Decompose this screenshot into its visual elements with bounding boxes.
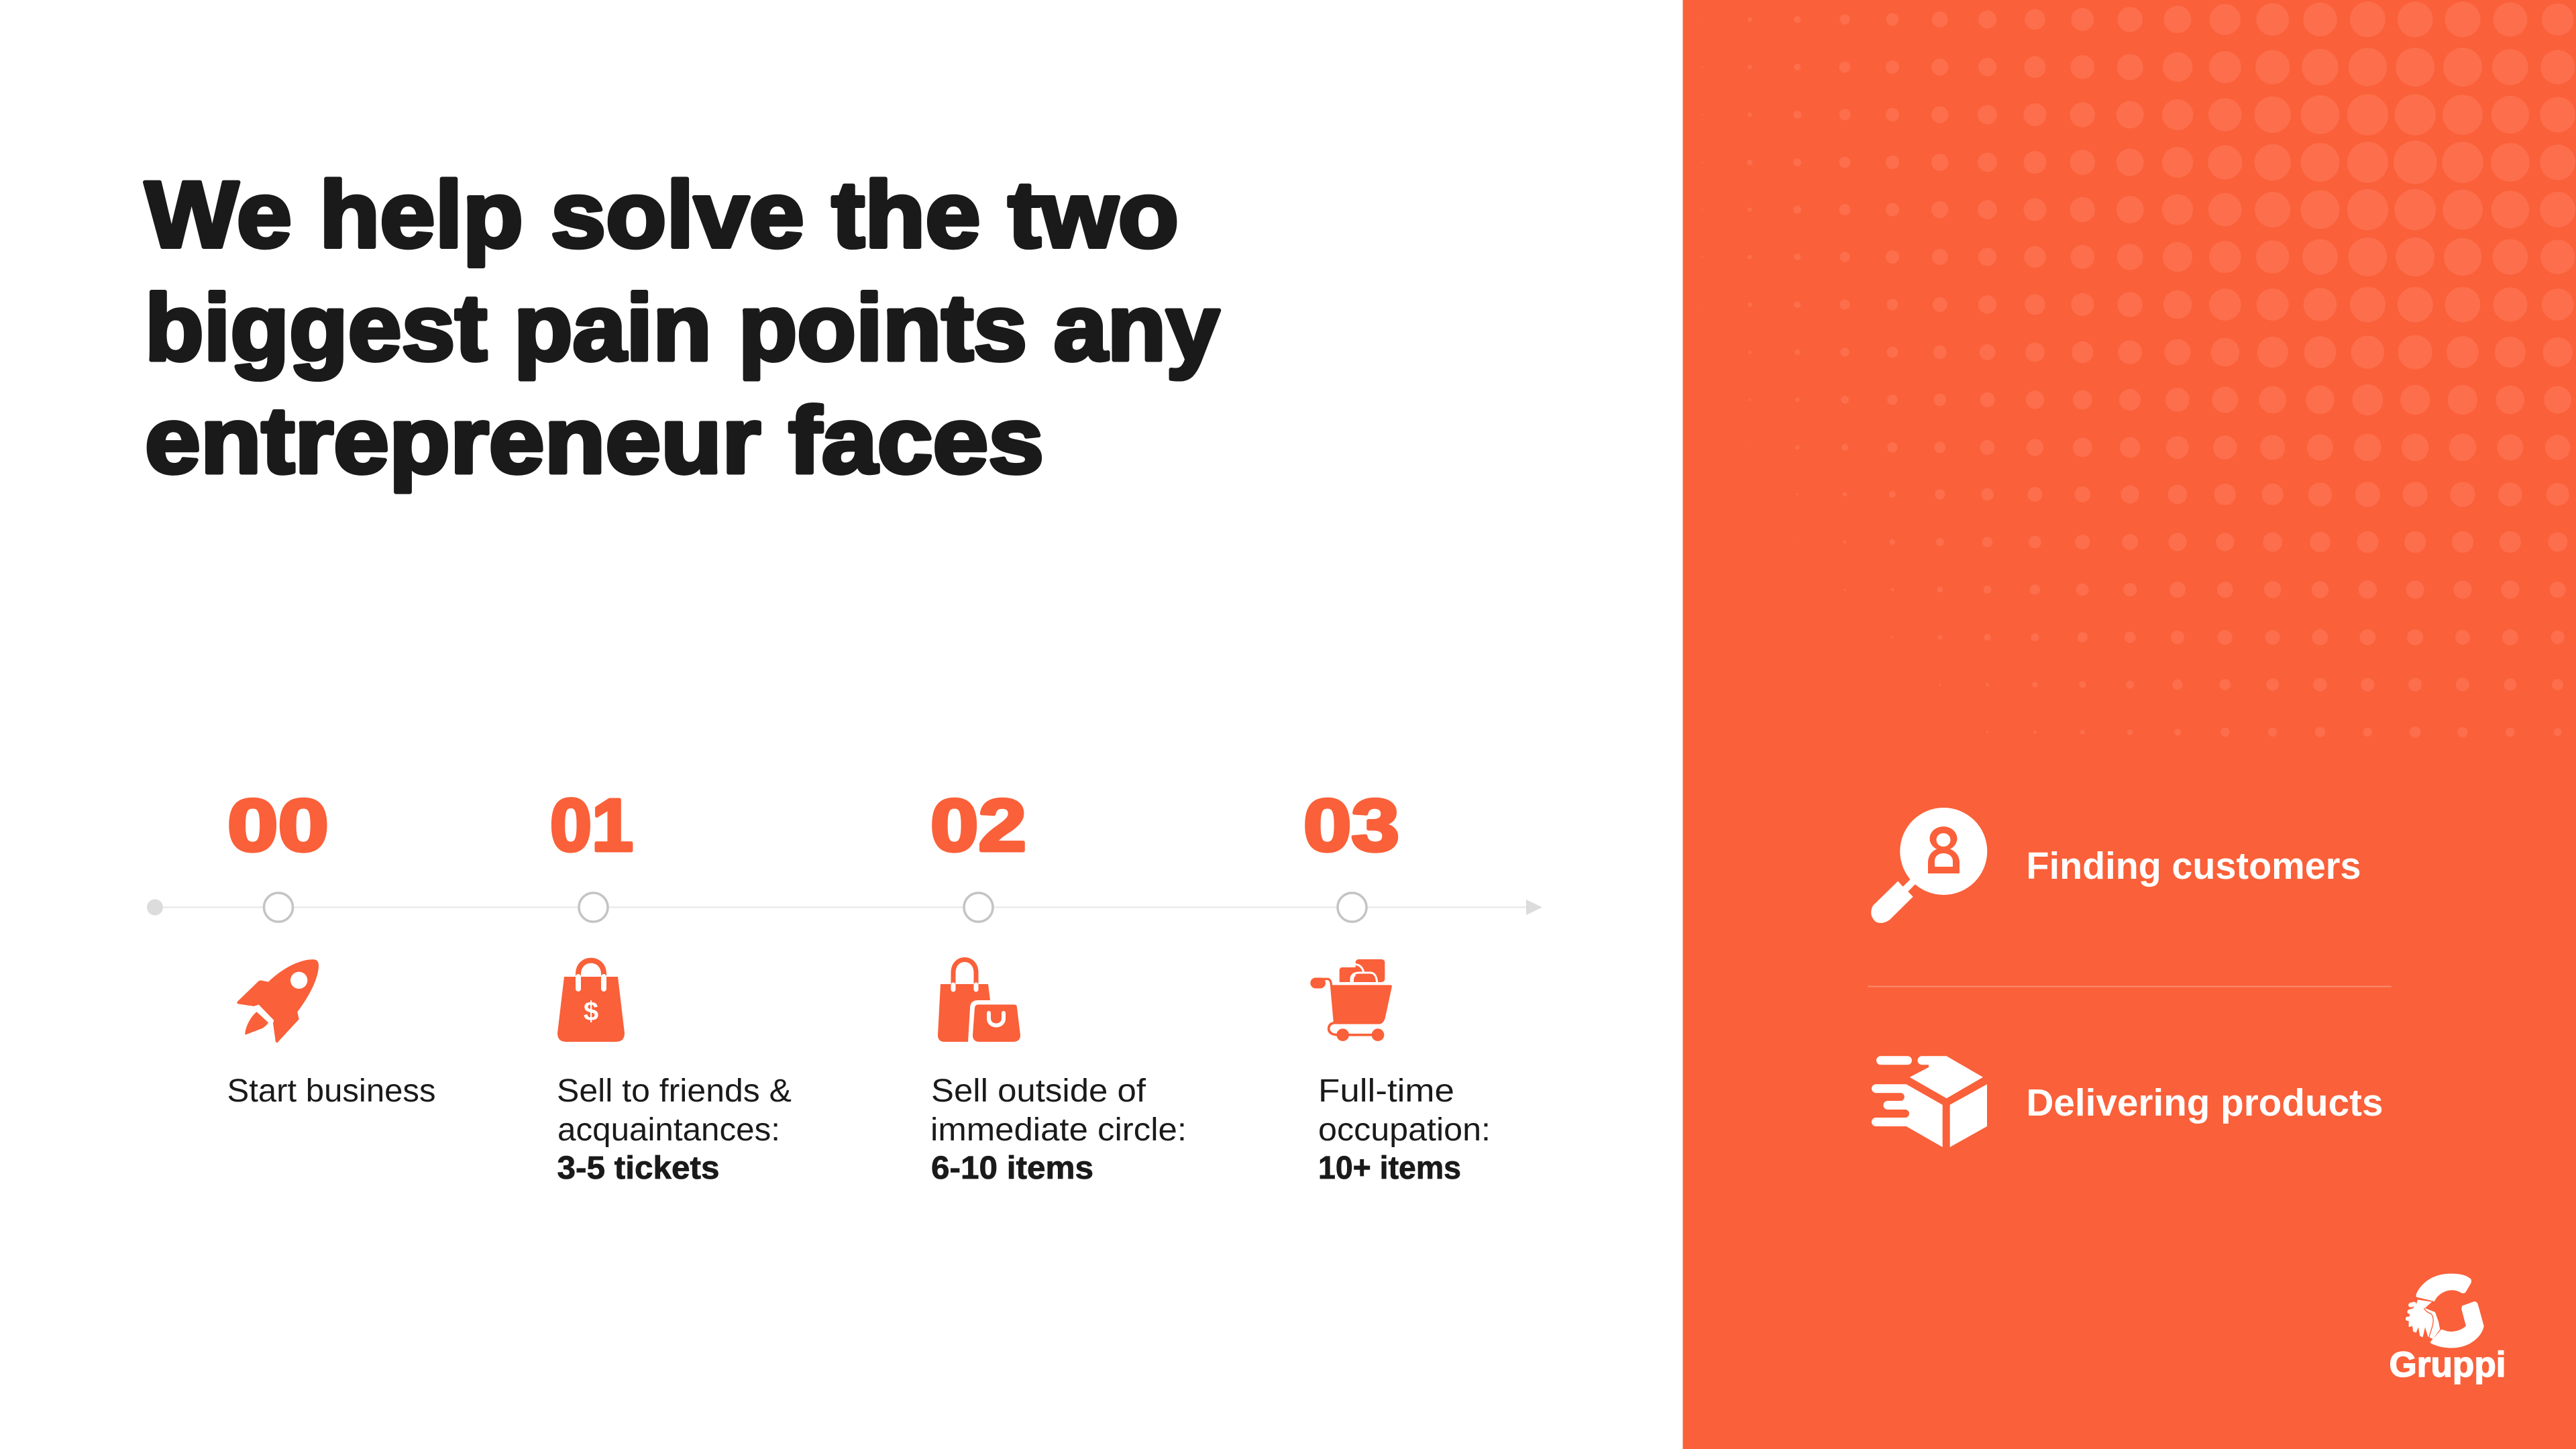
icon: delivery box bbox=[1872, 1056, 1987, 1147]
timeline axis bbox=[147, 893, 1542, 922]
step text: full-time: Full-time bbox=[1318, 1073, 1454, 1109]
step number 03: 03 bbox=[1303, 784, 1399, 867]
step text: sell to friends: Sell to friends & bbox=[557, 1073, 792, 1109]
step 03 bbox=[1303, 784, 1491, 1186]
icon: shopping cart bbox=[1310, 959, 1392, 1041]
step 00 bbox=[227, 784, 436, 1109]
logo: Gruppi bbox=[2390, 1274, 2506, 1385]
logo wordmark: Gruppi bbox=[2390, 1345, 2506, 1385]
step text: sell outside: Sell outside of bbox=[931, 1073, 1146, 1109]
step text: sell outside bbox=[930, 1073, 1187, 1186]
step text: sell to friends: acquaintances: bbox=[557, 1112, 780, 1148]
step 02 bbox=[930, 784, 1187, 1186]
step text: sell to friends: 3-5 tickets bbox=[557, 1150, 719, 1186]
step text: start business: Start business bbox=[227, 1073, 436, 1109]
icon: shopping bag with dollar bbox=[557, 961, 625, 1042]
panel: right orange panel bbox=[1682, 0, 2576, 1449]
title: We help solve the two bbox=[145, 162, 1179, 267]
title bbox=[145, 162, 1220, 492]
step text: full-time: occupation: bbox=[1318, 1112, 1491, 1148]
logo mark: G of clasped hands bbox=[2406, 1274, 2484, 1348]
icon: shopping bag with dollar: $ bbox=[584, 997, 598, 1026]
step text: sell outside: 6-10 items bbox=[931, 1150, 1093, 1186]
item: delivering products bbox=[1872, 1056, 2383, 1147]
label: delivering products: Delivering products bbox=[2026, 1081, 2383, 1124]
step text: sell outside: immediate circle: bbox=[930, 1112, 1187, 1148]
halftone dot pattern bbox=[1701, 1, 2575, 738]
step text: full-time: 10+ items bbox=[1318, 1150, 1461, 1186]
label: finding customers: Finding customers bbox=[2026, 845, 2361, 888]
title: biggest pain points any bbox=[145, 275, 1220, 380]
item: finding customers bbox=[1871, 808, 2361, 923]
icon: two shopping bags bbox=[938, 959, 1020, 1042]
icon: magnifier with person bbox=[1871, 808, 1987, 923]
step 01 bbox=[550, 784, 792, 1186]
step text: full-time bbox=[1318, 1073, 1491, 1186]
step text: sell to friends bbox=[557, 1073, 792, 1186]
step number 00: 00 bbox=[227, 784, 329, 867]
step number 01: 01 bbox=[550, 784, 633, 867]
icon: rocket bbox=[237, 959, 319, 1042]
step number 02: 02 bbox=[930, 784, 1026, 867]
title: entrepreneur faces bbox=[145, 388, 1044, 492]
